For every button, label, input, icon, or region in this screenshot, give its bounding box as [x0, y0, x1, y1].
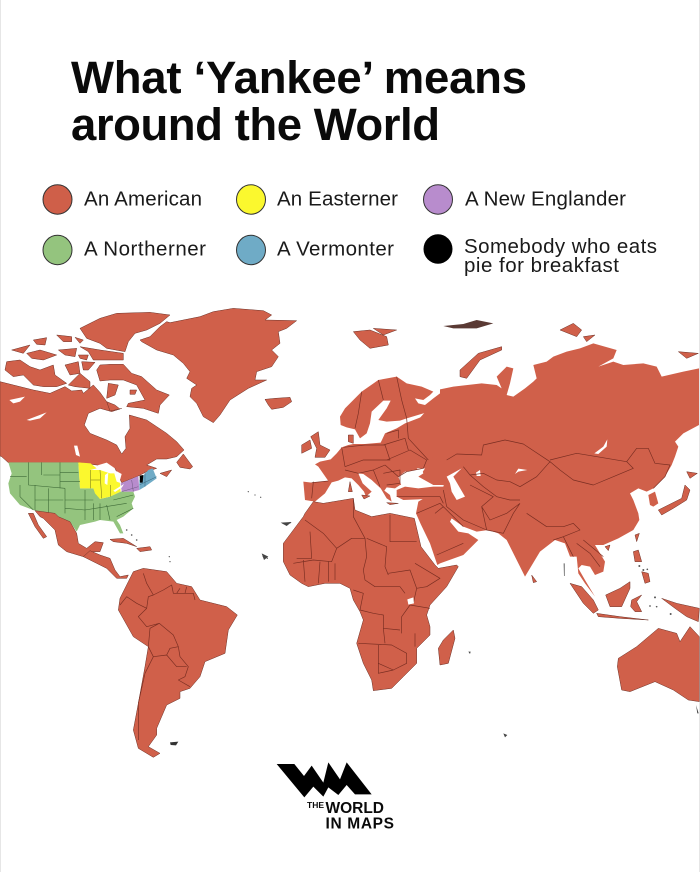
Japan [658, 485, 690, 515]
Central America [83, 551, 128, 578]
Denmark [348, 435, 353, 443]
United States: pie for breakfast [140, 475, 143, 483]
Sulawesi [631, 595, 642, 612]
Eurasian borders [397, 440, 670, 567]
Java [597, 613, 648, 620]
title [71, 52, 527, 150]
Novaya Zemlya [460, 347, 502, 378]
Africa, Oceania and Southeast Asian islands [262, 498, 699, 737]
legend item: A Northerner [43, 235, 206, 265]
Scandinavia and Finland [340, 377, 457, 438]
Sumatra [570, 583, 598, 613]
Atlantic island specks [126, 491, 291, 562]
Arctic islands [353, 330, 388, 348]
legend item: Somebody who eats pie for breakfast: pie for breakfast [464, 254, 619, 277]
US state lines [10, 462, 133, 520]
scattered islands [262, 522, 699, 737]
legend item: Somebody who eats pie for breakfast [424, 234, 657, 277]
legend [43, 185, 657, 277]
Sri Lanka [532, 575, 537, 583]
legend item: A New Englander: A New Englander [465, 188, 626, 210]
Philippines [633, 550, 642, 562]
Ireland [302, 440, 312, 453]
legend item: A New Englander [424, 185, 626, 214]
New Guinea [662, 598, 699, 622]
Hainan [605, 545, 610, 551]
legend item: An American [43, 185, 202, 214]
Borneo [606, 582, 630, 607]
African borders [293, 498, 440, 673]
logo text: IN MAPS [326, 816, 394, 832]
Caribbean [110, 538, 137, 547]
logo text [307, 800, 394, 832]
legend item: An American: An American [84, 188, 202, 210]
legend item: A Vermonter: A Vermonter [277, 238, 394, 260]
Canada and Arctic islands [0, 312, 193, 483]
Victoria and other islands [5, 335, 193, 477]
Australia [617, 627, 699, 702]
logo: The World in Maps [277, 762, 394, 832]
Greenland [140, 308, 297, 423]
United States: Vermonter [139, 468, 157, 490]
Baja California [28, 513, 47, 538]
island specks [564, 563, 672, 615]
Asia [312, 320, 699, 597]
Turkey [397, 487, 447, 500]
East and Southeast Asian islands [564, 472, 699, 622]
logo mark [277, 762, 372, 797]
Great Britain [311, 432, 330, 457]
legend item: An Easterner: An Easterner [277, 188, 398, 210]
Baffin Island [97, 364, 169, 413]
Great Lakes [97, 463, 124, 492]
title: around the World [71, 99, 440, 150]
legend item: An Easterner [236, 185, 398, 214]
Falkland Islands [170, 742, 178, 745]
title: What ‘Yankee’ means [71, 52, 527, 103]
South America [118, 568, 237, 757]
legend item: A Northerner: A Northerner [84, 238, 206, 260]
Asian mainland [400, 343, 699, 597]
legend item: Somebody who eats pie for breakfast: Somebody who eats [464, 235, 657, 258]
United States: Easterner [78, 462, 121, 499]
world map [0, 308, 699, 757]
logo text: WORLD [326, 800, 384, 817]
Canadian lakes [9, 397, 80, 457]
Americas and North Atlantic [8, 308, 297, 578]
Taiwan [635, 533, 639, 542]
Mediterranean islands [348, 482, 352, 492]
South American borders [120, 573, 195, 740]
legend item: A Vermonter [236, 235, 394, 265]
Korea [648, 492, 658, 507]
Canada and Alaska [0, 382, 184, 483]
European mainland [303, 403, 490, 502]
Madagascar [438, 630, 455, 665]
Iceland [265, 397, 292, 409]
Europe [302, 377, 490, 505]
United States: Northerner [8, 462, 135, 533]
logo text: THE [307, 800, 324, 810]
inland seas [398, 439, 607, 500]
Mexico [35, 511, 103, 558]
Ellesmere and Queen Elizabeth Islands [80, 312, 170, 352]
Africa [283, 498, 458, 691]
United States: New Englander [121, 476, 139, 492]
Lake Victoria [407, 597, 414, 605]
